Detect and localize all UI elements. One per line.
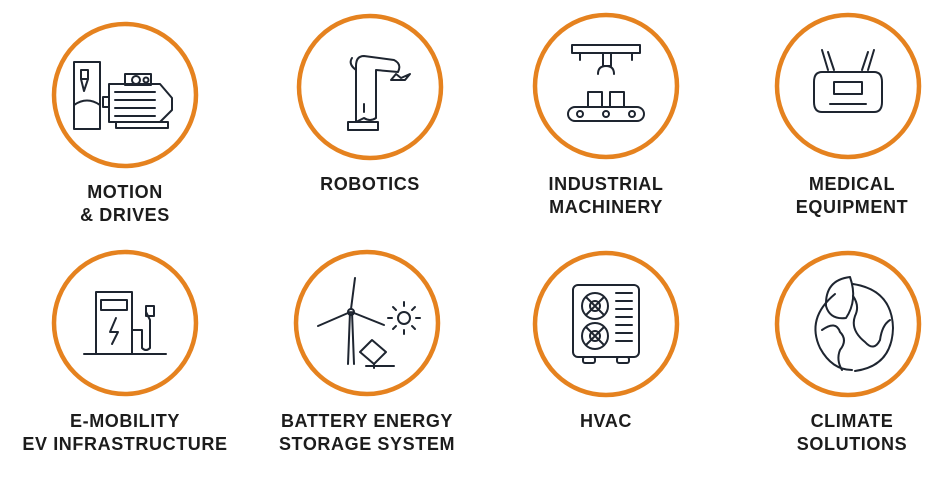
icon: globe with leaf	[815, 277, 893, 371]
item: climate solutions: CLIMATE	[811, 411, 893, 431]
item: motion & drives: & DRIVES	[80, 205, 170, 225]
item: e-mobility: E-MOBILITY	[70, 411, 180, 431]
icon: wind turbine, sun, solar panels	[318, 278, 420, 368]
item: battery energy storage system	[279, 252, 455, 454]
item: medical equipment	[777, 15, 919, 217]
item: medical equipment: MEDICAL	[809, 174, 895, 194]
item: motion & drives: MOTION	[87, 182, 163, 202]
item: industrial machinery: INDUSTRIAL	[548, 174, 664, 194]
icon: robot arm	[348, 56, 410, 130]
item: medical equipment: EQUIPMENT	[796, 197, 908, 217]
item: robotics: ROBOTICS	[320, 174, 420, 194]
icon: drive and motor	[74, 62, 172, 129]
item: climate solutions	[777, 253, 919, 454]
item: hvac: HVAC	[580, 411, 632, 431]
item: battery energy storage system: BATTERY ENERGY	[281, 411, 453, 431]
item: industrial machinery	[535, 15, 677, 217]
item: motion & drives	[54, 24, 196, 225]
item: industrial machinery: MACHINERY	[549, 197, 663, 217]
icon: hvac unit	[573, 285, 639, 363]
item: hvac	[535, 253, 677, 431]
icon: conveyor with gripper	[568, 45, 644, 121]
icon: medical device	[814, 50, 882, 112]
item: e-mobility	[22, 252, 228, 454]
item: e-mobility: EV INFRASTRUCTURE	[22, 434, 228, 454]
item: robotics	[299, 16, 441, 194]
item: climate solutions: SOLUTIONS	[797, 434, 907, 454]
item: battery energy storage system: STORAGE SYSTEM	[279, 434, 455, 454]
icon: ev charger	[84, 292, 166, 354]
